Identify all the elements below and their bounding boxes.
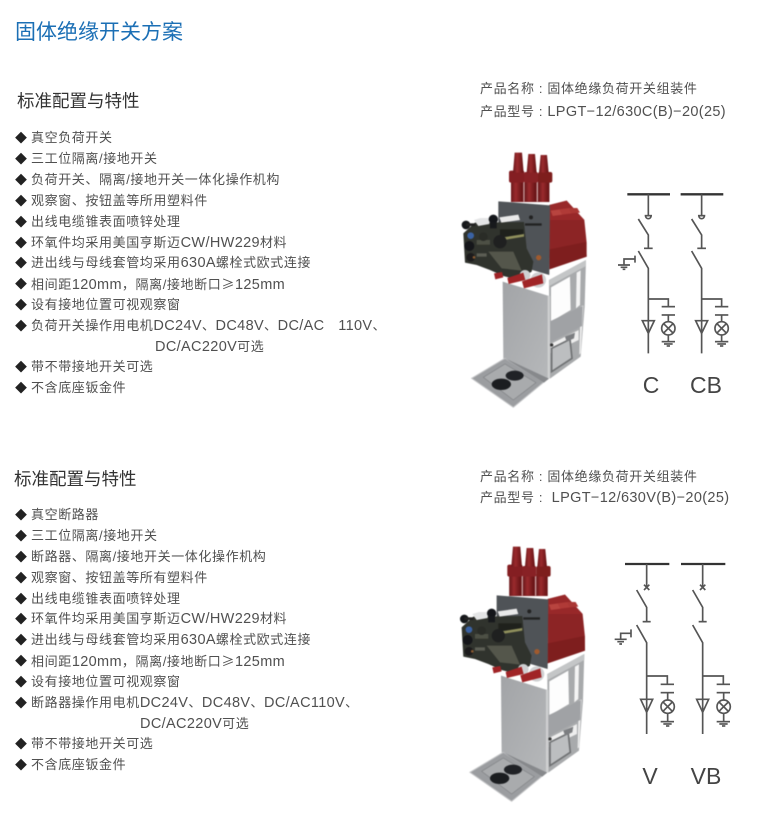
circuit diagram: CB [681, 194, 728, 353]
panel: section 1 specifications [15, 91, 386, 395]
feature list: section 2: 带不带接地开关可选 [31, 736, 153, 751]
feature list: section 1: ◆ [15, 319, 27, 333]
feature list: section 2: 出线电缆锥表面喷锌处理 [31, 591, 181, 606]
feature list: section 2: 三工位隔离/接地开关 [31, 528, 158, 543]
feature list: section 1: 相间距120mm，隔离/接地断口≥125mm [31, 274, 285, 293]
feature list: section 2: ◆ [15, 696, 27, 710]
feature list: section 2: 断路器、隔离/接地开关一体化操作机构 [31, 549, 266, 564]
feature list: section 1: 出线电缆锥表面喷锌处理 [31, 214, 181, 229]
feature list: section 2: DC/AC220V可选 [140, 716, 249, 732]
feature list: section 1: ◆ [15, 360, 27, 374]
heading: section 2: 标准配置与特性 [14, 469, 136, 489]
feature list: section 1: 不含底座钣金件 [31, 380, 126, 395]
feature list: section 1: 观察窗、按钮盖等所用塑料件 [31, 193, 208, 208]
feature list: section 1: ◆ [15, 256, 27, 270]
feature list: section 1: ◆ [15, 152, 27, 166]
product info: section 2 [480, 469, 729, 506]
label: CB: CB [690, 372, 722, 398]
feature list: section 2: ◆ [15, 550, 27, 564]
label: VB: VB [691, 763, 721, 789]
feature list: section 2: ◆ [15, 571, 27, 585]
feature list: section 2: ◆ [15, 612, 27, 626]
feature list: section 2: 真空断路器 [31, 507, 99, 522]
feature list: section 2: ◆ [15, 633, 27, 647]
feature list: section 2: ◆ [15, 529, 27, 543]
feature list: section 1: ◆ [15, 277, 27, 291]
title: 固体绝缘开关方案 [15, 21, 183, 44]
feature list: section 1: ◆ [15, 173, 27, 187]
feature list: section 1: ◆ [15, 298, 27, 312]
label: C: C [643, 372, 659, 398]
feature list: section 1: 带不带接地开关可选 [31, 359, 153, 374]
circuit diagram: C [618, 194, 675, 353]
label: V: V [642, 763, 658, 789]
product photo: section 1 switchgear [462, 153, 587, 407]
feature list: section 1: 三工位隔离/接地开关 [31, 151, 158, 166]
product info: section 2: 产品型号 : LPGT−12/630V(B)−20(25) [480, 490, 729, 506]
feature list: section 1: 环氧件均采用美国亨斯迈CW/HW229材料 [31, 235, 287, 251]
feature list: section 1: 真空负荷开关 [31, 130, 113, 145]
feature list: section 1: ◆ [15, 194, 27, 208]
feature list: section 2: ◆ [15, 737, 27, 751]
feature list: section 2: ◆ [15, 592, 27, 606]
feature list: section 1: ◆ [15, 131, 27, 145]
feature list: section 1: ◆ [15, 381, 27, 395]
feature list: section 2: 进出线与母线套管均采用630A螺栓式欧式连接 [31, 632, 311, 648]
feature list: section 2: ◆ [15, 654, 27, 668]
product info: section 1: 产品名称 : 固体绝缘负荷开关组装件 [480, 81, 698, 96]
product info: section 2: 产品名称 : 固体绝缘负荷开关组装件 [480, 469, 698, 484]
feature list: section 2 [15, 507, 359, 772]
product info: section 1 [480, 81, 726, 120]
feature list: section 1: 负荷开关、隔离/接地开关一体化操作机构 [31, 172, 280, 187]
product photo: section 2 switchgear [460, 547, 585, 801]
feature list: section 2: 断路器操作用电机DC24V、DC48V、DC/AC110V、 [31, 695, 359, 711]
circuit diagram: VB [681, 564, 730, 734]
feature list: section 1: 进出线与母线套管均采用630A螺栓式欧式连接 [31, 255, 311, 271]
feature list: section 1: ◆ [15, 236, 27, 250]
circuit diagram: V [615, 564, 674, 734]
feature list: section 2: 相间距120mm，隔离/接地断口≥125mm [31, 651, 285, 670]
feature list: section 2: ◆ [15, 675, 27, 689]
feature list: section 2: 观察窗、按钮盖等所有塑料件 [31, 570, 208, 585]
feature list: section 2: 设有接地位置可视观察窗 [31, 674, 181, 689]
panel: section 2 specifications [14, 469, 359, 772]
feature list: section 1: 设有接地位置可视观察窗 [31, 297, 181, 312]
feature list: section 2: 环氧件均采用美国亨斯迈CW/HW229材料 [31, 611, 287, 627]
feature list: section 1: 负荷开关操作用电机DC24V、DC48V、DC/AC 110V、 [31, 318, 386, 334]
feature list: section 2: 不含底座钣金件 [31, 757, 126, 772]
heading: section 1: 标准配置与特性 [17, 91, 140, 111]
feature list: section 2: ◆ [15, 508, 27, 522]
feature list: section 1: DC/AC220V可选 [155, 339, 264, 355]
feature list: section 1: ◆ [15, 215, 27, 229]
feature list: section 1 [15, 130, 386, 395]
feature list: section 2: ◆ [15, 758, 27, 772]
product info: section 1: 产品型号 : LPGT−12/630C(B)−20(25) [480, 104, 726, 120]
